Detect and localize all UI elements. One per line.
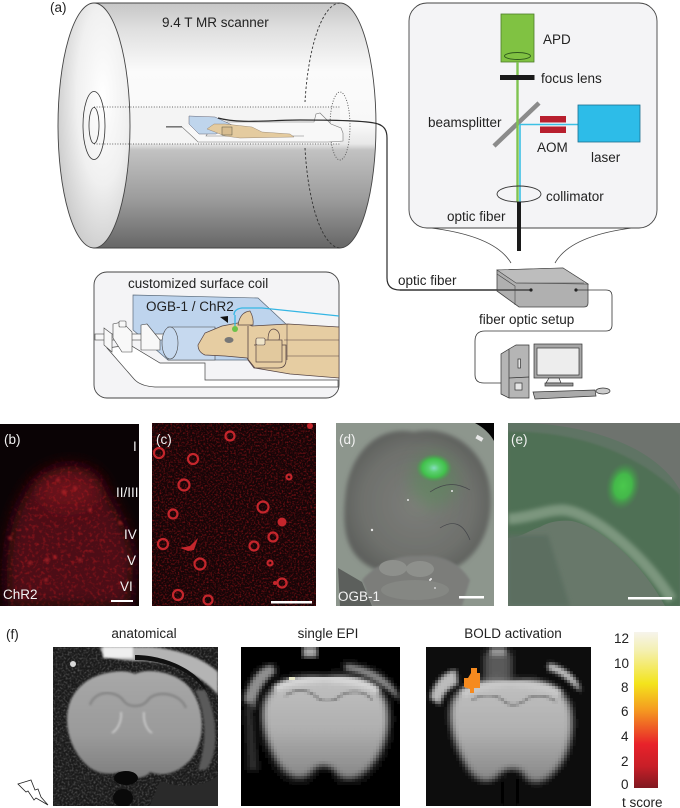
fiber optic setup box: [400, 268, 588, 307]
heading single EPI: single EPI: [298, 626, 358, 641]
upper right background: [530, 423, 680, 490]
scale bar c: [271, 601, 312, 604]
beamsplitter: [494, 103, 539, 146]
cerebellum: [362, 556, 470, 606]
brainstem dark: [114, 771, 138, 785]
colorbar ticks: 8: [621, 680, 629, 695]
blue excitation beam: [520, 124, 578, 202]
panel: (c) neurons: [152, 423, 316, 606]
colorbar ticks: 10: [614, 656, 629, 671]
arrowhead: [220, 316, 228, 323]
panel: optical path: [409, 3, 657, 263]
panel: anatomical MRI: [53, 647, 218, 807]
label (d): (d): [339, 432, 356, 447]
icon: computer: [501, 344, 610, 399]
cortical layer labels: V: [127, 553, 136, 568]
activation cluster: [464, 668, 480, 693]
brain: [263, 676, 388, 779]
red fibre texture: [152, 423, 316, 606]
panel label (f): (f): [6, 627, 19, 642]
cortical layer labels: [3, 439, 139, 602]
optic fiber: [517, 202, 521, 251]
scalp and muscle: [100, 647, 218, 695]
collimator: [497, 186, 541, 202]
holder platform: [107, 345, 338, 387]
corpus callosum arcs: [90, 693, 186, 708]
brain: [67, 671, 202, 778]
scale bar b: [111, 600, 133, 602]
colorbar ticks: 2: [621, 754, 629, 769]
heading anatomical: anatomical: [111, 626, 177, 641]
label (b): (b): [4, 432, 20, 447]
white matter band: [508, 510, 672, 600]
label: beamsplitter: beamsplitter: [428, 115, 502, 130]
label: fiber optic setup: fiber optic setup: [479, 312, 574, 327]
panel: (b) ChR2 histology: [0, 424, 139, 606]
panel: customized surface coil inset: [94, 272, 339, 398]
laser: [578, 105, 640, 142]
brain: [450, 680, 572, 782]
blue optical fiber: [234, 308, 339, 316]
cortical layer labels: IV: [124, 527, 137, 542]
label OGB-1: OGB-1: [338, 589, 380, 604]
label (c): (c): [156, 432, 172, 447]
cortical layer labels: ChR2: [3, 587, 38, 602]
cortical layer labels: VI: [120, 579, 133, 594]
colorbar ticks: 4: [621, 729, 629, 744]
connector curves: [431, 228, 632, 263]
label: AOM: AOM: [537, 140, 568, 155]
cortical layer labels: II/III: [116, 485, 139, 500]
label: coil: customized surface coil: [128, 276, 268, 291]
label: optic fiber: optic fiber: [398, 273, 457, 288]
label: OGB-1 / ChR2: OGB-1 / ChR2: [146, 299, 234, 314]
striatum: [508, 521, 665, 606]
panel: (a) scanner: [58, 3, 530, 290]
blue coil box: [133, 295, 287, 360]
panel: single EPI: [241, 647, 400, 806]
AOM: [540, 116, 566, 133]
cortical layer labels: I: [133, 439, 137, 454]
panel: (e) brain section: [508, 423, 680, 606]
colorbar ticks: [614, 631, 663, 808]
speckle: [7, 466, 134, 606]
label: APD: APD: [543, 32, 571, 47]
colorbar ticks: 0: [621, 777, 629, 792]
label: optic fiber: optic fiber: [447, 209, 506, 224]
panel: (d) OGB-1 whole brain: [336, 423, 494, 606]
scale bar e: [628, 597, 672, 600]
neuron rings: [154, 432, 292, 604]
label: collimator: collimator: [546, 189, 604, 204]
colorbar ticks: 12: [614, 631, 629, 646]
green fluorescence: [410, 464, 455, 507]
label: scanner: 9.4 T MR scanner: [162, 15, 269, 30]
label: laser: laser: [591, 150, 621, 165]
panel: BOLD activation map: [426, 647, 592, 806]
panel label (a): (a): [50, 0, 66, 15]
APD detector: [501, 14, 534, 62]
icon: lightning: [18, 780, 48, 805]
cortex: [508, 432, 680, 606]
scale bar d: [459, 596, 484, 598]
cable to computer: [475, 290, 612, 383]
colorbar ticks: 6: [621, 704, 629, 719]
optic fiber from scanner to setup: [218, 118, 530, 290]
rat: [198, 311, 339, 378]
bright upper band: [38, 474, 98, 510]
green spot: [608, 464, 638, 508]
label: focus lens: focus lens: [541, 71, 602, 86]
focus lens: [500, 75, 534, 80]
heading BOLD activation: BOLD activation: [464, 626, 562, 641]
miniature animal holder in bore: [166, 113, 343, 142]
rod and clamps: [95, 321, 215, 360]
brain: [344, 431, 491, 576]
label (e): (e): [511, 432, 528, 447]
injection site: [232, 326, 238, 332]
green detection beam: [516, 62, 519, 202]
colorbar: [634, 632, 658, 788]
scanner cylinder: [58, 3, 376, 248]
